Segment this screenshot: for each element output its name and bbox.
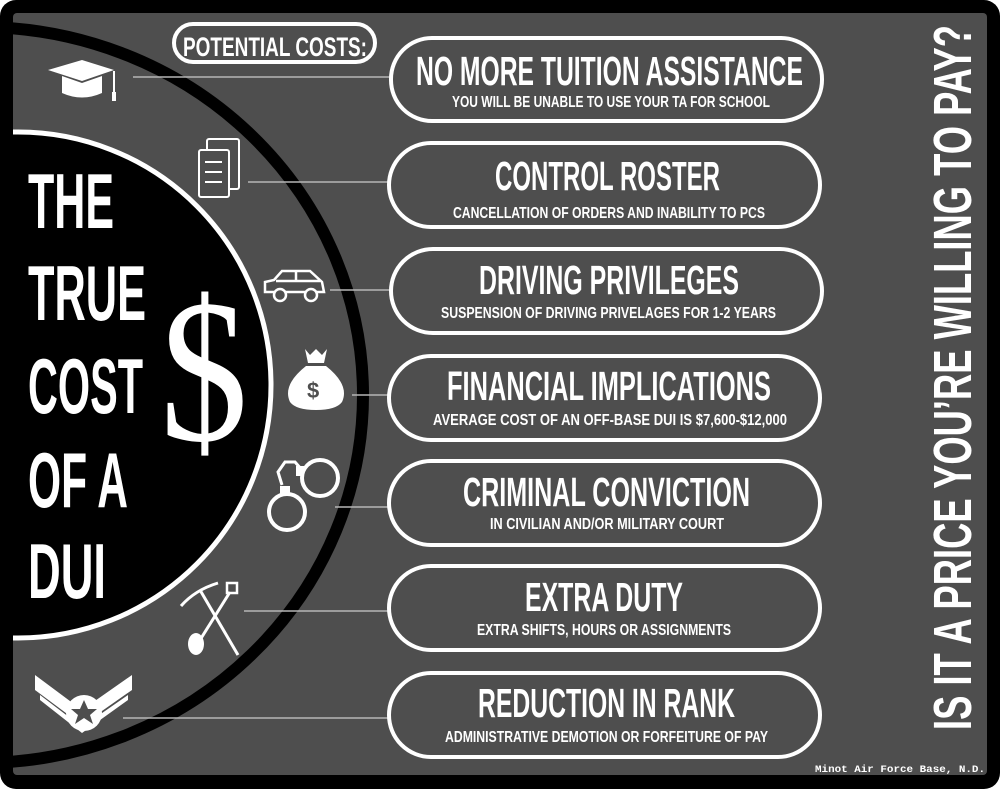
title: the true cost of a dui: TRUE [28, 249, 146, 337]
panel: reduction in rank: REDUCTION IN RANK [478, 680, 735, 726]
panel: reduction in rank: ADMINISTRATIVE DEMOTION OR FORFEITURE OF PAY [445, 729, 768, 746]
icon: money bag: $ [307, 378, 319, 403]
icon: airman chevron [35, 675, 132, 733]
panel: control roster: CONTROL ROSTER [495, 153, 720, 199]
panel: tuition assistance: YOU WILL BE UNABLE TO USE YOUR TA FOR SCHOOL [452, 94, 770, 111]
panel: extra duty [389, 566, 820, 650]
footer credit: Minot Air Force Base, N.D. [815, 764, 985, 776]
outer ring [0, 27, 363, 763]
panel: driving privileges: SUSPENSION OF DRIVING PRIVELAGES FOR 1-2 YEARS [441, 305, 776, 322]
panel: financial implications [389, 356, 820, 440]
icon: money bag [288, 349, 344, 410]
panel: financial implications: AVERAGE COST OF AN OFF-BASE DUI IS $7,600-$12,000 [433, 412, 787, 429]
heading: potential costs [174, 24, 375, 62]
icon: car [265, 271, 324, 301]
panel: control roster [389, 143, 820, 227]
panel: driving privileges [391, 249, 822, 333]
panel: financial implications: FINANCIAL IMPLICATIONS [447, 363, 771, 409]
icon: pick and shovel [181, 583, 238, 655]
title: the true cost of a dui: COST [28, 342, 143, 430]
icon: big dollar sign: $ [160, 258, 248, 485]
icon: handcuffs [269, 460, 338, 530]
title: the true cost of a dui: OF A [28, 436, 128, 524]
panel: control roster: CANCELLATION OF ORDERS AND INABILITY TO PCS [453, 205, 765, 222]
panel: criminal conviction: CRIMINAL CONVICTION [463, 469, 750, 515]
icon: documents [199, 139, 239, 197]
panel: criminal conviction [389, 461, 820, 545]
title: the true cost of a dui [28, 157, 146, 615]
panel: criminal conviction: IN CIVILIAN AND/OR MILITARY COURT [490, 516, 724, 533]
heading: potential costs: POTENTIAL COSTS: [183, 32, 367, 62]
title: the true cost of a dui: THE [28, 157, 114, 245]
panel: extra duty: EXTRA DUTY [525, 574, 683, 620]
title: the true cost of a dui: DUI [28, 527, 106, 615]
panel: driving privileges: DRIVING PRIVILEGES [479, 257, 739, 303]
icon: graduation cap [48, 60, 116, 101]
connector lines [123, 77, 392, 718]
panel: tuition assistance [391, 38, 822, 121]
panel: reduction in rank [389, 673, 820, 757]
panel: extra duty: EXTRA SHIFTS, HOURS OR ASSIGNMENTS [477, 622, 731, 639]
black disk with title [0, 132, 271, 638]
